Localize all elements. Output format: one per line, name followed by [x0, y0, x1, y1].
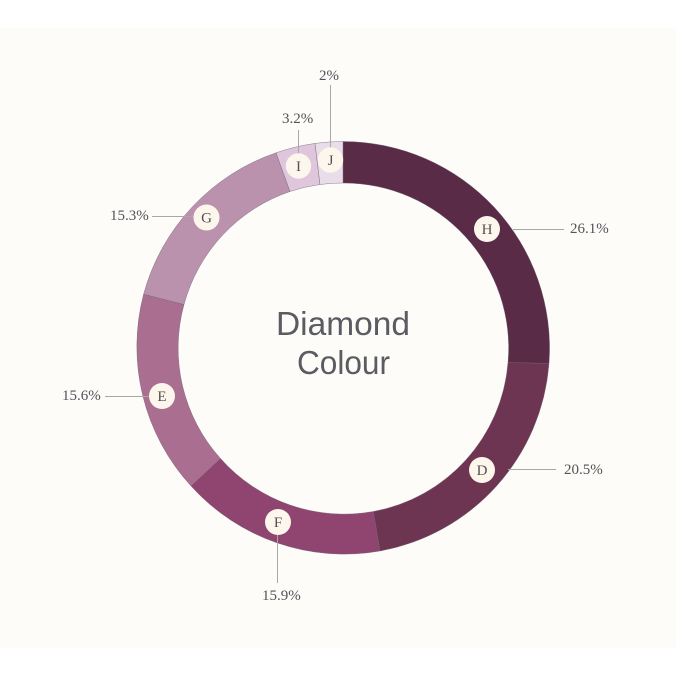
segment H [343, 141, 550, 364]
segment I [276, 143, 320, 192]
callout J: 2% [318, 68, 343, 173]
callout D: 20.5% [469, 457, 603, 483]
callout E: 15.6%: 15.6% [62, 388, 101, 404]
callout G: 15.3%: G [201, 210, 212, 226]
callout E: 15.6%: E [157, 389, 167, 405]
callout G: 15.3% [110, 204, 220, 230]
title: Diamond [276, 306, 410, 343]
callout F: 15.9%: 15.9% [262, 588, 301, 604]
callout F: 15.9%: F [274, 515, 282, 531]
callout D: 20.5%: D [477, 463, 488, 479]
callout I: 3.2%: 3.2% [282, 111, 313, 127]
segment J [315, 141, 343, 184]
segment F [191, 458, 380, 554]
callout H: 26.1%: 26.1% [570, 221, 609, 237]
segment E [137, 294, 220, 486]
callout J: 2%: 2% [319, 68, 339, 84]
callout G: 15.3%: 15.3% [110, 208, 149, 224]
segment G [144, 153, 290, 304]
callout J: 2%: J [328, 153, 334, 169]
callout F: 15.9% [262, 509, 301, 604]
callout H: 26.1% [474, 216, 609, 242]
callout D: 20.5%: 20.5% [564, 462, 603, 478]
segment D [373, 362, 549, 551]
title: Colour [297, 345, 390, 382]
callout H: 26.1%: H [482, 222, 493, 238]
callout E: 15.6% [62, 383, 175, 409]
callout I: 3.2% [282, 111, 313, 179]
donut chart: diamond colour [137, 141, 550, 554]
title [276, 306, 410, 382]
callout I: 3.2%: I [296, 159, 301, 175]
